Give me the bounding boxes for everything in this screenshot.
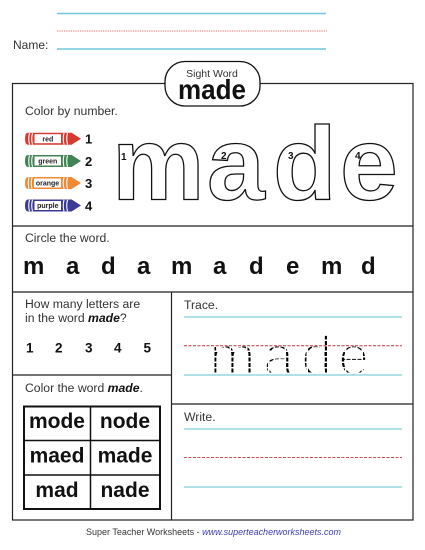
worksheet frame [12, 84, 413, 520]
heading: color the word: Color the word made. [25, 381, 143, 395]
number choices: 1 [26, 340, 34, 356]
heading: circle the word: Circle the word. [25, 231, 110, 245]
letter row: d [249, 253, 264, 280]
letter row: d [101, 253, 116, 280]
question: How many letters are [25, 297, 140, 311]
letter row: a [213, 253, 227, 280]
heading: write: Write. [184, 410, 216, 424]
word grid: made [98, 444, 152, 468]
letter row: a [137, 253, 151, 280]
crayon: green: 2 [85, 154, 92, 169]
word grid: mad [35, 479, 79, 502]
letter row: e [286, 253, 299, 280]
word grid: mode [29, 410, 85, 433]
crayon: green [25, 154, 92, 169]
name label: Name: [13, 38, 48, 52]
heading: trace: Trace. [184, 298, 218, 312]
title badge: Sight Word [186, 68, 238, 80]
panel: how many letters [25, 297, 152, 356]
crayon: orange [25, 176, 92, 191]
number choices: 2 [55, 340, 63, 356]
letter row: d [361, 253, 376, 280]
letter row: m [171, 253, 192, 280]
writing guide lines [184, 429, 402, 487]
panel: color the word [24, 381, 160, 509]
letter row: m [23, 253, 44, 280]
outlined word: made: made [112, 106, 398, 222]
panel: circle the word [23, 231, 376, 280]
footer credit: Super Teacher Worksheets - www.superteacherworksheets.com [86, 527, 342, 537]
word grid: nade [100, 479, 150, 502]
number choices: 4 [114, 340, 122, 356]
color key numbers on letters: 3 [288, 151, 294, 162]
trace guide lines [184, 317, 402, 375]
heading: color by number: Color by number. [25, 104, 118, 118]
crayon: orange: orange [36, 180, 59, 188]
color key numbers on letters: 2 [221, 151, 227, 162]
number choices: 5 [144, 340, 152, 356]
crayon: red: 1 [85, 132, 92, 146]
crayon: red [25, 132, 92, 146]
word grid: maed [30, 444, 84, 468]
crayon: red: red [42, 136, 53, 143]
letter row [23, 253, 376, 280]
crayon: purple: purple [37, 203, 59, 210]
crayon: green: green [38, 158, 57, 166]
question: in the word made? [25, 311, 127, 325]
title badge: made [178, 74, 246, 105]
word grid: node [100, 410, 150, 433]
crayon: orange: 3 [85, 176, 92, 191]
panel: trace [184, 298, 402, 387]
panel: color by number [25, 104, 398, 222]
word grid [24, 406, 160, 509]
crayon: purple: 4 [85, 198, 93, 214]
crayon: purple [25, 198, 93, 214]
number choices [26, 340, 152, 356]
color key numbers on letters: 1 [121, 152, 127, 163]
number choices: 3 [85, 340, 93, 356]
dashed tracing word: made [209, 324, 369, 387]
letter row: a [66, 253, 80, 280]
color key numbers on letters: 4 [355, 151, 361, 162]
color key numbers on letters [121, 151, 361, 163]
letter row: m [321, 253, 342, 280]
title badge [165, 62, 260, 106]
